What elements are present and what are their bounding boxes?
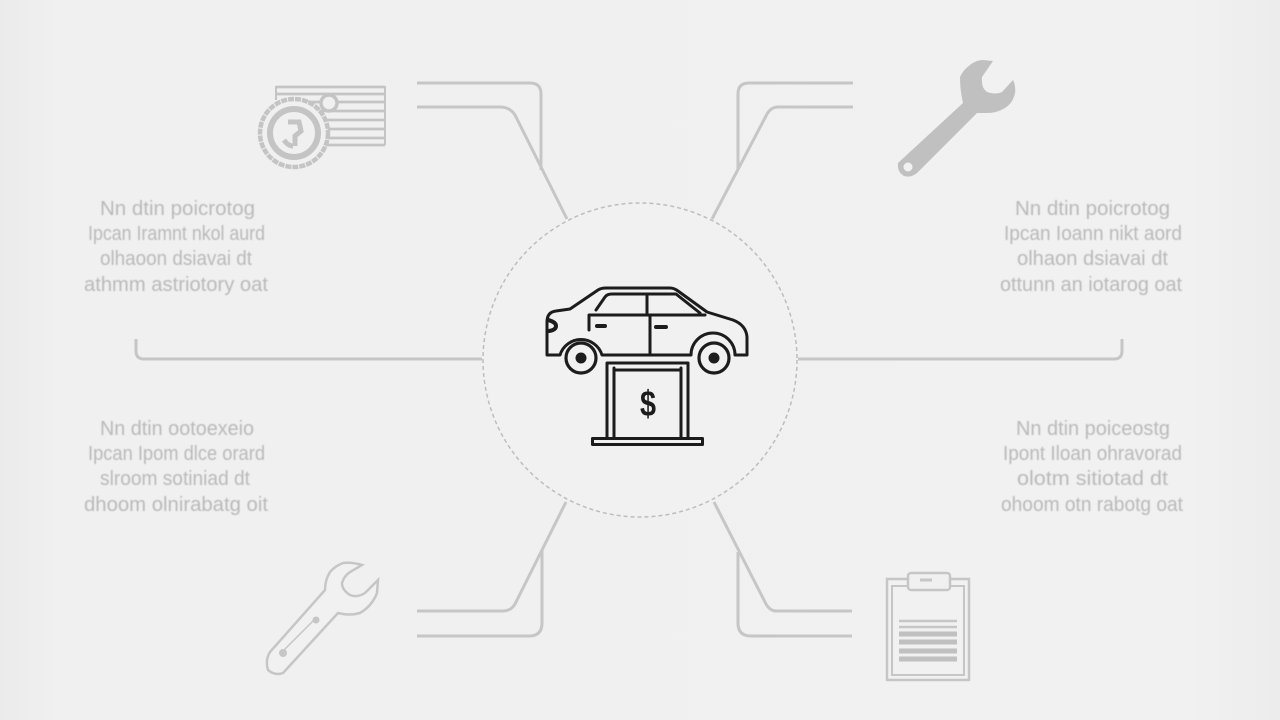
connector: bottom left [417, 502, 566, 636]
text block: upper right: Ipcan Ioann nikt aord [1004, 223, 1182, 245]
connector: top left [417, 83, 567, 219]
text block: lower left: dhoom olnirabatg oit [84, 494, 268, 516]
text block: upper left [84, 198, 268, 296]
text block: lower right [1001, 418, 1183, 516]
text block: lower right: ohoom otn rabotg oat [1001, 494, 1183, 516]
text block: upper left: athmm astriotory oat [84, 274, 268, 296]
text block: lower right: Nn dtin poiceostg [1016, 418, 1170, 440]
connector: top right [712, 83, 853, 219]
text block: lower left [84, 418, 268, 516]
small gear [321, 95, 337, 111]
lift posts and beam [607, 363, 688, 437]
icon: tire and document lines [260, 86, 385, 167]
connector: middle right [798, 339, 1122, 359]
lift base [592, 438, 702, 444]
tire hub [284, 122, 301, 146]
text block: lower left: Nn dtin ootoexeio [100, 418, 254, 440]
icon: clipboard [887, 573, 969, 680]
document stripes [276, 87, 385, 145]
dollar sign: $ [640, 383, 656, 424]
text block: lower right: olotm sitiotad dt [1017, 468, 1168, 490]
car door handles and lamp [548, 320, 666, 331]
icon: solid wrench [898, 60, 1015, 177]
text block: upper right: ottunn an iotarog oat [1000, 274, 1182, 296]
text block: upper right [1000, 198, 1182, 296]
hubs [576, 352, 720, 364]
wheels [566, 343, 729, 373]
clipboard text lines [899, 621, 957, 627]
text block: upper left: olhaoon dsiavai dt [100, 248, 252, 270]
connector: bottom right [714, 502, 852, 636]
car body [547, 288, 747, 355]
text block: upper right: Nn dtin poicrotog [1015, 198, 1170, 220]
connector: middle left [136, 339, 482, 359]
text block: lower left: slroom sotiniad dt [100, 468, 250, 490]
text block: lower left: Ipcan Ipom dlce orard [88, 443, 265, 465]
text block: upper left: Ipcan Iramnt nkol aurd [88, 223, 265, 245]
text block: upper right: olhaon dsiavai dt [1017, 248, 1168, 270]
text block: upper left: Nn dtin poicrotog [100, 198, 255, 220]
car windows and doors [589, 294, 705, 353]
center dashed circle [483, 203, 797, 517]
tire [260, 99, 328, 167]
icon: car on lift with dollar sign [547, 288, 747, 444]
text block: lower right: Ipont Iloan ohravorad [1003, 443, 1182, 465]
icon: outline wrench [267, 563, 378, 674]
